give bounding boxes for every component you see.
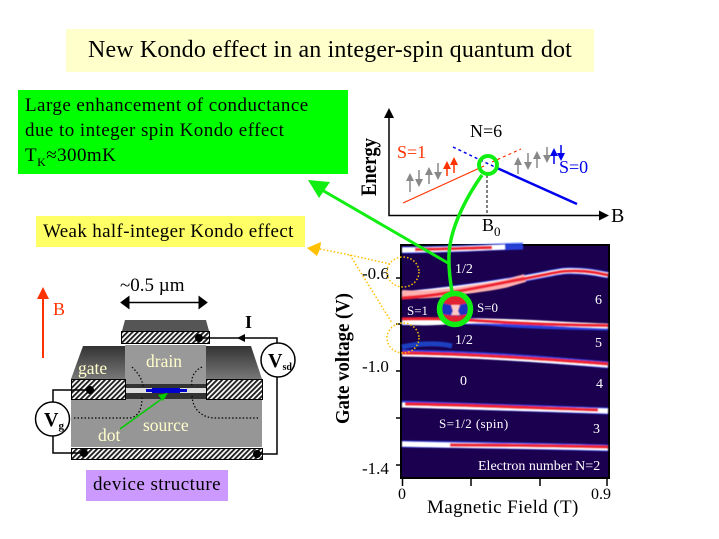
drain contact — [122, 332, 210, 344]
drain column — [125, 345, 206, 388]
title: New Kondo effect in an integer-spin quantum dot — [88, 37, 572, 63]
caption: device structure: device structure — [93, 474, 221, 495]
plot annotations: 6 — [595, 293, 602, 308]
plot annotations: S=1/2 (spin) — [439, 416, 509, 431]
S=1 line — [403, 166, 484, 203]
energy axes — [389, 112, 605, 216]
plot annotations: 3 — [593, 422, 600, 437]
conductance colormap: Magnetic Field (T) — [427, 497, 579, 518]
callout: large enhancement of conductance: TK≈300mK — [25, 145, 116, 169]
device labels: drain — [146, 351, 182, 371]
magnetic field arrow — [42, 298, 44, 358]
conductance colormap: 0.9 — [591, 486, 611, 503]
Vsd meter — [261, 343, 295, 377]
B0 label: B — [482, 215, 494, 235]
device diagram: sd — [282, 362, 292, 373]
conductance colormap — [332, 245, 611, 518]
callout: weak half-integer Kondo effect: Weak half-integer Kondo effect — [43, 221, 294, 242]
plot annotations: 4 — [596, 377, 603, 392]
B axis label: B — [611, 205, 624, 227]
drain cap — [122, 320, 209, 331]
conductance ridges — [402, 246, 608, 448]
y tick labels — [362, 264, 389, 478]
y tick labels: -1.4 — [362, 459, 389, 478]
current label: I — [245, 312, 252, 332]
depletion dotted lines — [74, 367, 258, 418]
device diagram: V — [44, 409, 58, 431]
spin arrows blue — [550, 145, 565, 164]
spin arrows red — [443, 157, 458, 176]
plot annotations: 0 — [460, 374, 467, 389]
title — [66, 29, 594, 72]
green ring upper — [479, 156, 497, 174]
green arrows and ring — [308, 156, 497, 324]
Vg meter — [36, 402, 70, 436]
dotted Kondo circles and leaders — [320, 249, 419, 353]
callout: large enhancement of conductance — [18, 90, 348, 174]
callout: weak half-integer Kondo effect — [36, 216, 305, 247]
plot annotations: 1/2 — [455, 262, 473, 277]
caption: device structure — [86, 470, 228, 501]
dot pointer — [120, 398, 163, 429]
wire nodes — [80, 334, 261, 458]
y tick labels: -1.0 — [362, 357, 389, 376]
Kondo spot inside ring — [441, 295, 469, 323]
gate top — [71, 346, 262, 379]
device labels: gate — [78, 358, 107, 378]
plot annotations — [407, 262, 603, 474]
device labels: source — [143, 415, 189, 435]
S=0 line — [497, 168, 577, 204]
plot annotations: S=1 — [407, 303, 428, 318]
green ring lower — [440, 294, 470, 324]
plot background — [401, 245, 609, 478]
x axis labels: 0 — [398, 486, 406, 503]
B0 label: 0 — [494, 224, 501, 239]
S=0 label: S=0 — [559, 157, 588, 177]
axis arrowheads — [384, 108, 609, 220]
source contact — [72, 448, 262, 460]
plot annotations: 1/2 — [455, 333, 473, 348]
arrow: to weak Kondo callout — [307, 242, 321, 256]
device labels — [78, 351, 189, 445]
barrier layers — [125, 384, 206, 399]
device diagram — [36, 275, 295, 460]
green arrow to conductance callout — [322, 190, 448, 263]
device diagram: V — [268, 350, 282, 372]
energy axis label: Energy — [356, 138, 381, 196]
callout: large enhancement of conductance: due to integer spin Kondo effect — [25, 120, 284, 141]
callout: large enhancement of conductance: Large enhancement of conductance — [25, 95, 309, 116]
N=6 label: N=6 — [470, 121, 502, 141]
plot annotations: Electron number N=2 — [478, 459, 600, 474]
energy diagram — [356, 108, 624, 239]
device labels: dot — [98, 425, 120, 445]
green connector — [449, 175, 482, 292]
tick marks — [396, 278, 607, 486]
plot annotations: 5 — [595, 336, 602, 351]
y tick labels: -0.6 — [362, 264, 389, 283]
current arrow — [237, 334, 245, 342]
spin arrows grey — [406, 147, 551, 192]
S=1 label: S=1 — [397, 142, 426, 162]
size label: ~0.5 µm — [120, 275, 185, 296]
size arrow — [125, 302, 203, 304]
quantum dot — [146, 389, 187, 392]
gate contacts — [72, 380, 126, 400]
device diagram: g — [58, 420, 64, 432]
y axis label: Gate voltage (V) — [332, 293, 354, 424]
source body — [71, 399, 262, 447]
plot annotations: S=0 — [477, 300, 498, 315]
wiring — [53, 338, 277, 454]
B label: B — [53, 299, 65, 319]
B0 dashed line — [486, 175, 488, 215]
